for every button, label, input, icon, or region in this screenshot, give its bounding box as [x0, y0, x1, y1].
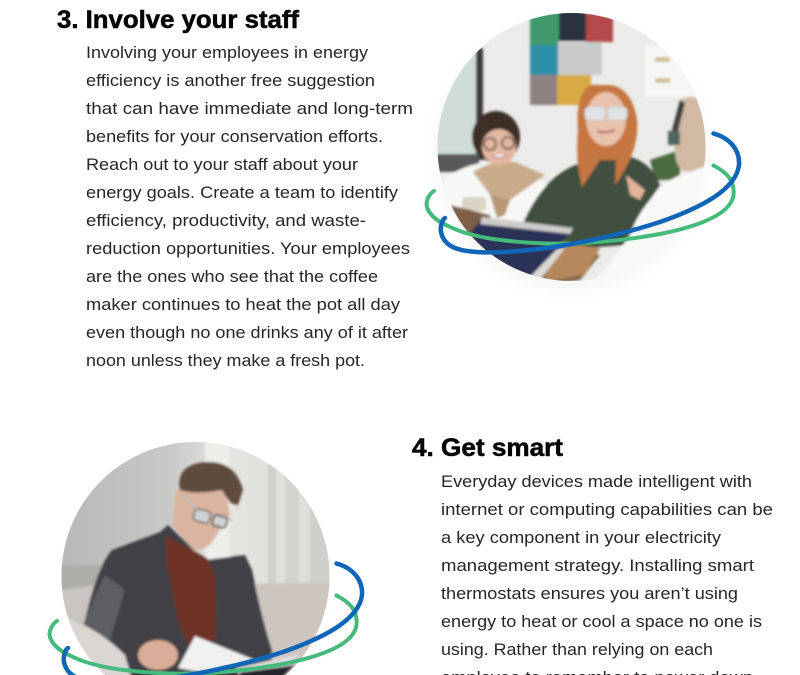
- text block: staff paragraph: even though no one drinks any of it after: [86, 323, 408, 342]
- icon: orbit rings: [50, 564, 362, 675]
- section 4: get smart: [50, 434, 773, 675]
- photo: man reading documents in circle with rings: [50, 435, 362, 675]
- text block: smart devices paragraph: using. Rather than relying on each: [441, 640, 713, 659]
- photo: staff meeting in circle with rings: [427, 5, 739, 291]
- text block: staff paragraph: noon unless they make a fresh pot.: [86, 351, 365, 370]
- text block: smart devices paragraph: management strategy. Installing smart: [441, 556, 754, 575]
- text block: staff paragraph: Involving your employees in energy: [86, 43, 369, 62]
- woman right: [520, 155, 660, 250]
- text block: staff paragraph: energy goals. Create a team to identify: [86, 183, 399, 202]
- plant: [650, 150, 680, 180]
- heading: 3. Involve your staff: 3. Involve your staff: [57, 6, 300, 34]
- text block: smart devices paragraph: internet or computing capabilities can be: [441, 500, 773, 519]
- text block: staff paragraph: efficiency is another free suggestion: [86, 71, 375, 90]
- text block: staff paragraph: maker continues to heat the pot all day: [86, 295, 401, 314]
- text block: staff paragraph: that can have immediate and long-term: [86, 99, 413, 118]
- text block: smart devices paragraph: a key component in your electricity: [441, 528, 722, 547]
- jacket: [83, 525, 272, 675]
- text block: smart devices paragraph: thermostats ensures you aren’t using: [441, 584, 738, 603]
- text block: staff paragraph: [86, 43, 413, 370]
- pillow: [68, 618, 135, 675]
- text block: staff paragraph: reduction opportunities. Your employees: [86, 239, 410, 258]
- head: [172, 482, 230, 552]
- text block: staff paragraph: efficiency, productivity, and waste-: [86, 211, 366, 230]
- text block: smart devices paragraph: energy to heat or cool a space no one is: [441, 612, 762, 631]
- text block: staff paragraph: Reach out to your staff about your: [86, 155, 358, 174]
- sweater: [165, 535, 216, 650]
- text block: smart devices paragraph: [441, 472, 773, 675]
- text block: staff paragraph: are the ones who see that the coffee: [86, 267, 378, 286]
- sofa: [254, 582, 330, 675]
- heading: 4. Get smart: 4. Get smart: [412, 434, 564, 462]
- table and laptop: [450, 205, 600, 285]
- icon: orbit rings: [427, 134, 739, 252]
- text block: smart devices paragraph: Everyday devices made intelligent with: [441, 472, 752, 491]
- text block: staff paragraph: benefits for your conservation efforts.: [86, 127, 383, 146]
- man right: [596, 166, 704, 278]
- woman left: [442, 160, 548, 222]
- hand and paper: [138, 640, 178, 670]
